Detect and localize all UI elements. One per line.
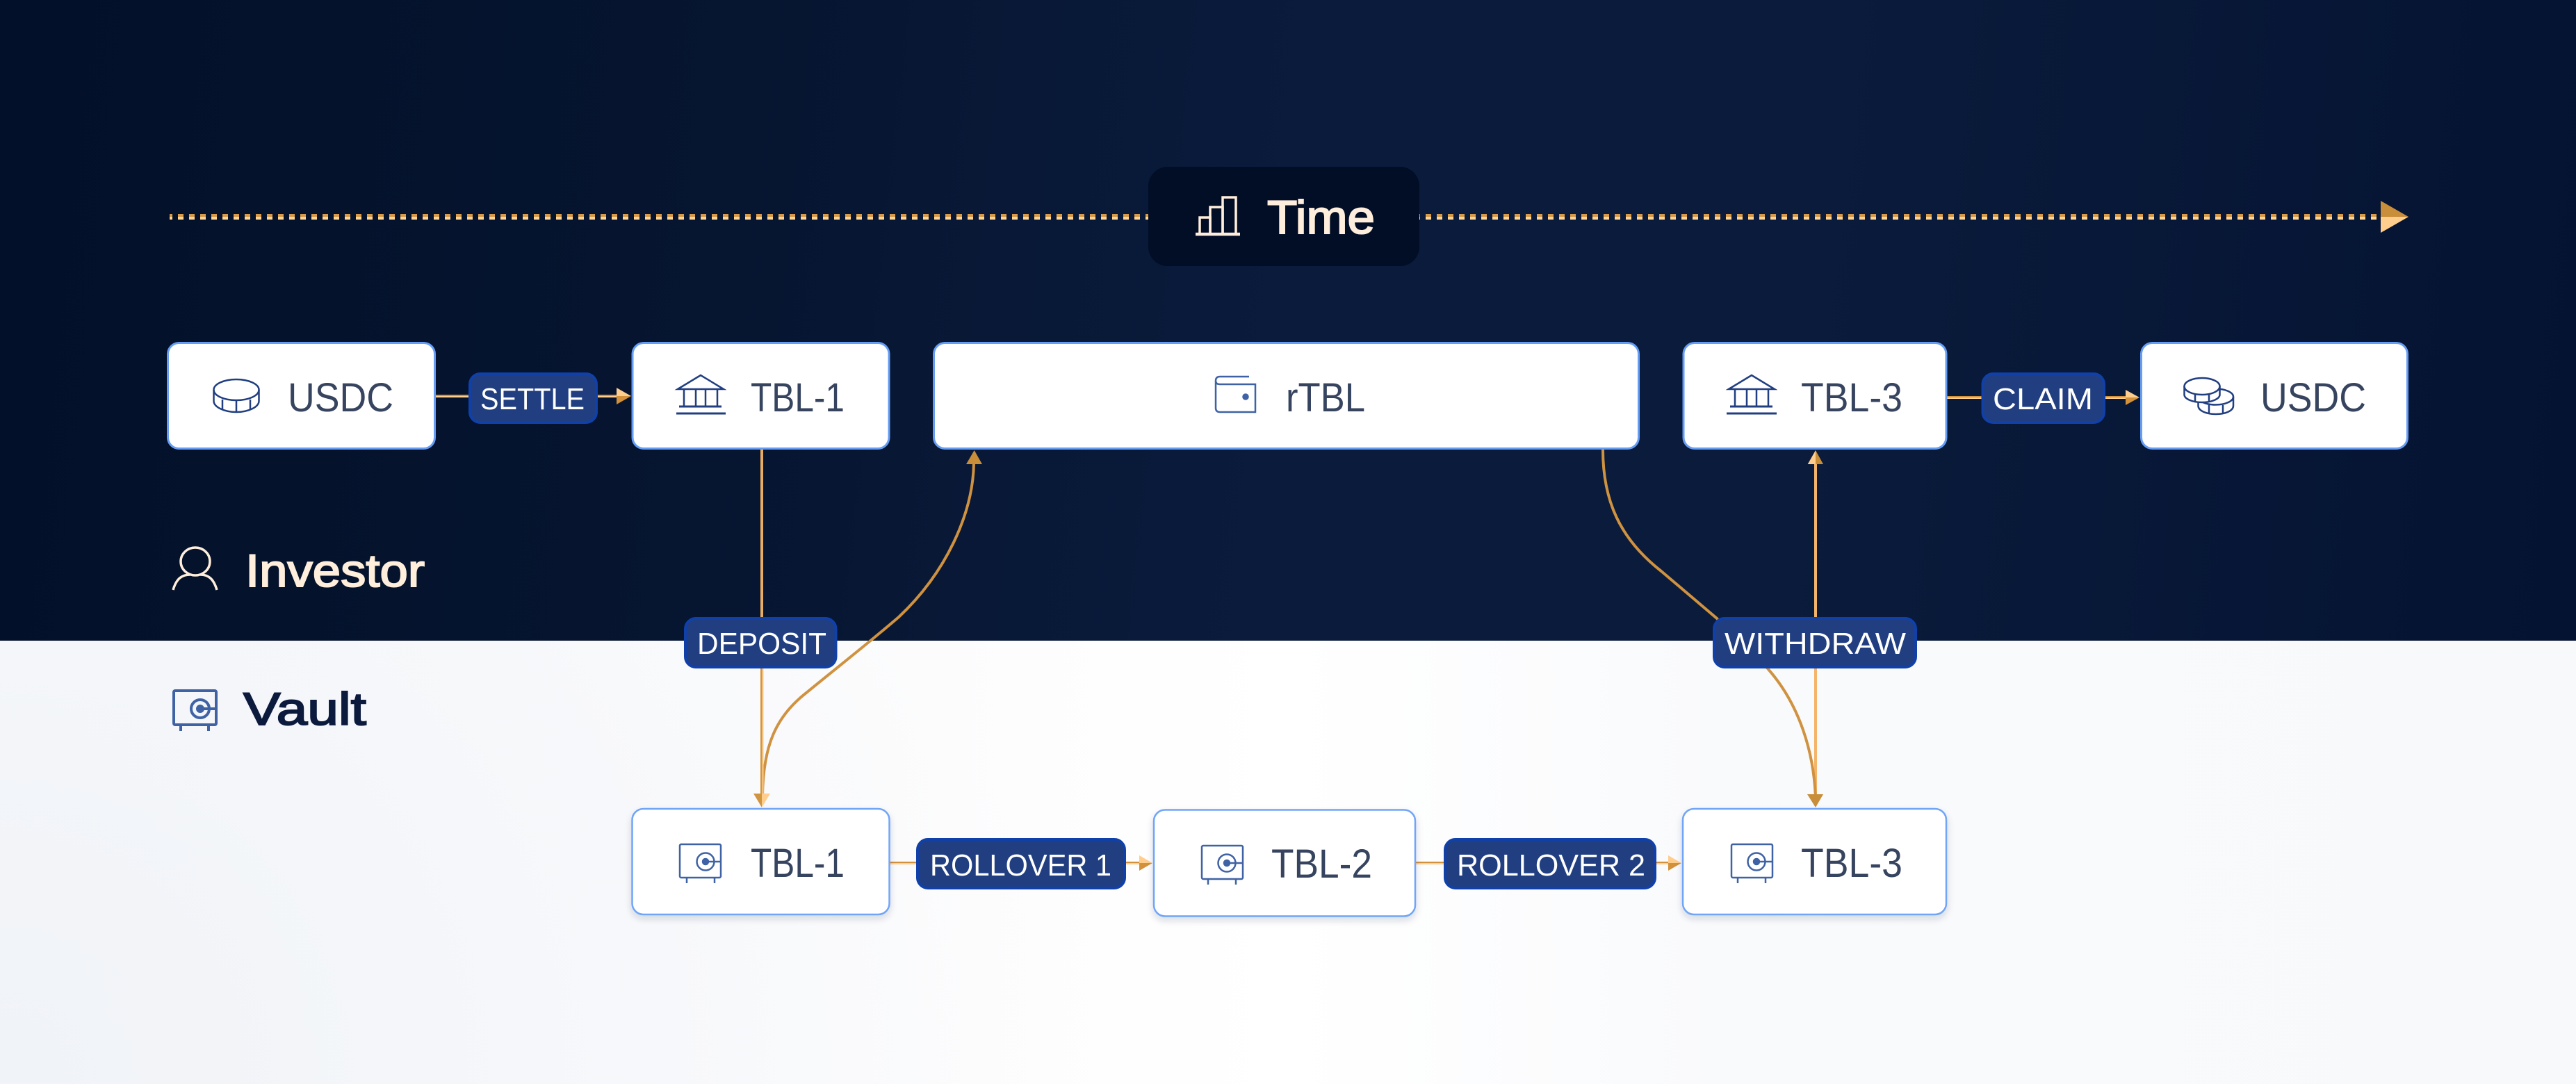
pill: ROLLOVER 1 (918, 839, 1125, 888)
node: TBL-1 investor: TBL-1 (751, 375, 845, 420)
arrow: deposit into TBL-1 vault (753, 450, 770, 807)
icon: safe (1202, 846, 1243, 885)
node: TBL-3 investor (1684, 343, 1946, 449)
icon: bank (1727, 375, 1777, 413)
pill: SETTLE: SETTLE (480, 382, 585, 416)
pill: ROLLOVER 2 (1445, 839, 1655, 888)
pill: CLAIM: CLAIM (1993, 382, 2093, 416)
pill: WITHDRAW (1714, 618, 1916, 667)
time axis arrow (170, 201, 2408, 233)
icon: wallet (1216, 377, 1255, 412)
node: rTBL (934, 343, 1639, 449)
node: USDC (168, 343, 435, 449)
vault node: TBL-2 (1154, 810, 1415, 916)
icon: coin (214, 379, 259, 412)
label: Vault: Vault (243, 683, 366, 734)
icon: bar chart (1196, 197, 1240, 234)
arrow: mint curve to rTBL (763, 450, 982, 796)
panel: vault background (0, 641, 2576, 1084)
icon: person (173, 548, 217, 590)
icon: safe (680, 844, 721, 883)
vault node: TBL-2: TBL-2 (1271, 841, 1372, 887)
icon: safe (1731, 844, 1772, 883)
panel: investor background (0, 0, 2576, 641)
node: USDC claimed: USDC (2260, 375, 2366, 420)
pill: SETTLE (470, 374, 596, 422)
icon: two coins (2184, 378, 2233, 414)
arrow: redeem curve from rTBL to TBL-3 vault (1603, 450, 1823, 807)
pill: WITHDRAW: WITHDRAW (1725, 627, 1906, 661)
vault node: TBL-1: TBL-1 (751, 841, 845, 886)
node: TBL-1 investor (633, 343, 889, 449)
vault node: TBL-3: TBL-3 (1801, 841, 1902, 886)
vault node: TBL-3 (1683, 809, 1946, 914)
icon: bank (676, 375, 726, 413)
node: rTBL: rTBL (1286, 375, 1365, 420)
node: USDC claimed (2141, 343, 2408, 449)
arrow: TBL-2 to TBL-3 vault (1416, 855, 1681, 871)
pill: ROLLOVER 1: ROLLOVER 1 (930, 848, 1111, 882)
label: Investor (173, 545, 425, 596)
arrow: TBL-1 to TBL-2 vault (890, 855, 1152, 871)
pill: DEPOSIT: DEPOSIT (697, 627, 826, 661)
node: TBL-3 investor: TBL-3 (1801, 375, 1902, 420)
arrow: TBL-3 to USDC (1947, 390, 2139, 405)
icon: safe (174, 691, 216, 731)
time badge (1148, 167, 1419, 266)
pill: CLAIM (1982, 374, 2104, 422)
arrow: withdraw up to TBL-3 (1808, 450, 1823, 796)
pill: DEPOSIT (685, 618, 835, 667)
heading: Time: Time (1267, 191, 1375, 244)
node: USDC: USDC (288, 375, 393, 420)
pill: ROLLOVER 2: ROLLOVER 2 (1457, 848, 1645, 882)
label: Investor: Investor (245, 545, 425, 596)
label: Vault (174, 683, 366, 734)
vault node: TBL-1 (633, 809, 890, 914)
arrow: USDC to TBL-1 (436, 388, 631, 404)
